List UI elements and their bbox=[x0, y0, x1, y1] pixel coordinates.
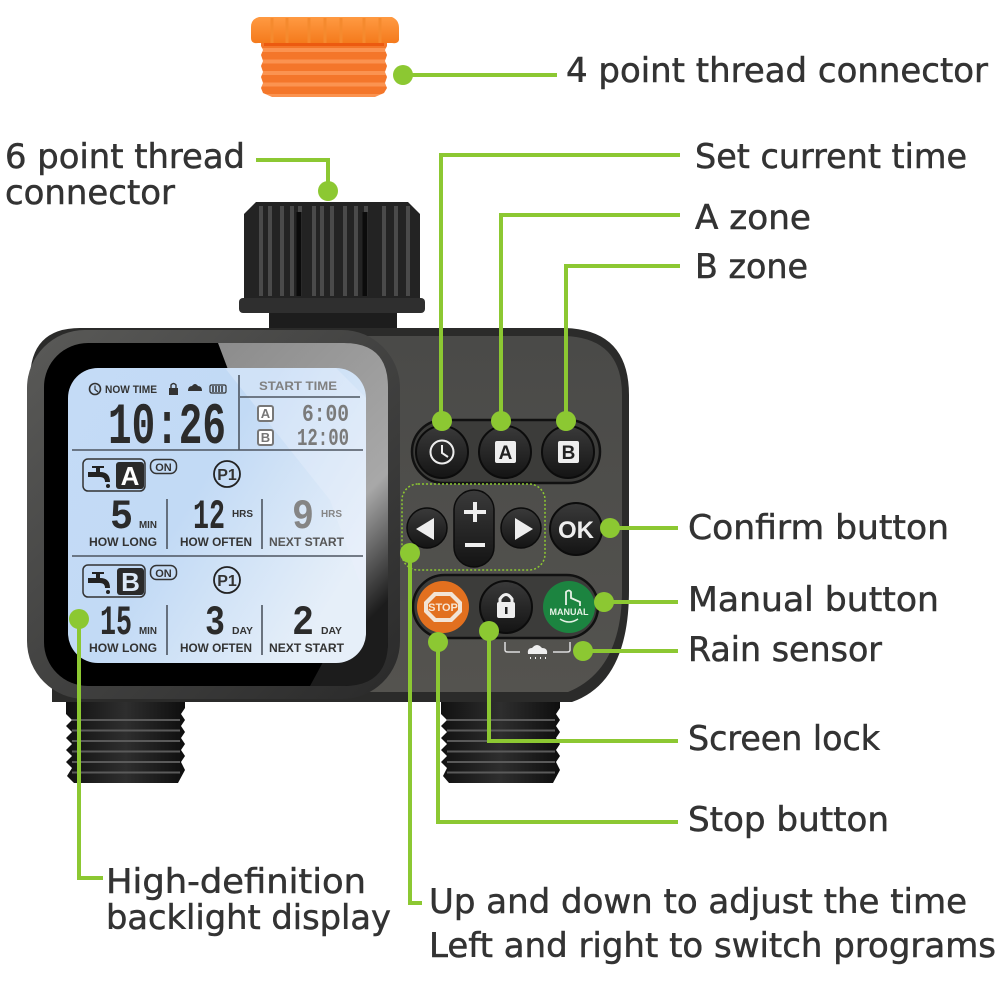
callout line: B zone bbox=[556, 266, 680, 431]
zone B program bbox=[83, 565, 345, 655]
callout line: set current time bbox=[432, 155, 680, 431]
callout line: backlight display bbox=[69, 609, 103, 878]
OK button bbox=[550, 503, 602, 555]
zone A program: MIN bbox=[139, 520, 157, 531]
orange 4 point thread connector bbox=[251, 17, 399, 97]
OK button: OK bbox=[558, 517, 595, 544]
callout line: stop button bbox=[428, 632, 678, 822]
control panel surface bbox=[360, 336, 622, 692]
label: 6 point thread connector: connector bbox=[5, 173, 175, 213]
top button group: clock, A, B: A bbox=[499, 443, 513, 464]
bottom button group: stop, lock, manual bbox=[413, 575, 598, 638]
current time readout: 10:26 bbox=[108, 396, 226, 461]
callout line: 4 point thread connector bbox=[393, 65, 557, 85]
directional keypad bbox=[402, 484, 545, 570]
callout line: screen lock bbox=[479, 621, 678, 741]
label: rain sensor: Rain sensor bbox=[688, 630, 882, 670]
timer body bbox=[30, 328, 629, 702]
zone B program: HOW LONG bbox=[89, 641, 157, 655]
label: set current time: Set current time bbox=[695, 137, 967, 177]
zone A program: HRS bbox=[321, 509, 342, 520]
label: keypad directions: Left and right to switch programs bbox=[429, 926, 996, 966]
inlet nut with 6 point thread bbox=[239, 202, 425, 330]
zone B program: HOW OFTEN bbox=[180, 641, 252, 655]
callout line: manual button bbox=[594, 592, 678, 612]
threaded outlet right bbox=[441, 700, 560, 783]
label: 6 point thread connector: 6 point thread bbox=[5, 137, 245, 177]
start time panel: START TIME bbox=[259, 379, 337, 393]
zone B program: DAY bbox=[321, 626, 342, 637]
threaded outlet left bbox=[66, 700, 185, 783]
label: B zone: B zone bbox=[695, 247, 808, 287]
callout line: 6 point thread connector bbox=[256, 160, 338, 201]
label: screen lock: Screen lock bbox=[688, 719, 880, 759]
start time panel: A bbox=[261, 406, 271, 421]
zone B program: DAY bbox=[232, 626, 253, 637]
start time panel: B bbox=[261, 430, 270, 445]
label: high-definition backlight display: backlight display bbox=[106, 898, 391, 938]
zone A program: 12 bbox=[193, 493, 225, 541]
label: high-definition backlight display: High-definition bbox=[106, 862, 366, 902]
screen bezel bbox=[27, 330, 400, 699]
zone B program: MIN bbox=[139, 626, 157, 637]
label: confirm button: Confirm button bbox=[688, 508, 949, 548]
start time panel: 6:00 bbox=[302, 402, 349, 429]
rain sensor icon bbox=[505, 642, 570, 658]
label: stop button: Stop button bbox=[688, 800, 889, 840]
zone A program: 9 bbox=[292, 493, 314, 541]
label: keypad directions: Up and down to adjust the time bbox=[429, 882, 967, 922]
bottom button group: stop, lock, manual: MANUAL bbox=[550, 607, 589, 617]
callout line: confirm button bbox=[600, 518, 678, 538]
label: 4 point thread connector: 4 point thread connector bbox=[566, 51, 988, 91]
zone A program: ON bbox=[155, 462, 172, 474]
zone B program: P1 bbox=[217, 573, 237, 590]
LCD screen bbox=[68, 368, 366, 663]
callout line: keypad directions bbox=[400, 543, 422, 903]
label: manual button: Manual button bbox=[688, 580, 939, 620]
zone A program: NEXT START bbox=[269, 535, 345, 549]
zone A program: A bbox=[121, 461, 140, 491]
callout line: A zone bbox=[491, 215, 680, 431]
zone B program: NEXT START bbox=[269, 641, 345, 655]
zone B program: 3 bbox=[205, 599, 225, 647]
zone B program: ON bbox=[155, 568, 172, 580]
start time panel bbox=[258, 379, 349, 453]
top button group: clock, A, B bbox=[412, 420, 600, 483]
zone B program: 15 bbox=[100, 599, 132, 647]
label: A zone: A zone bbox=[695, 198, 811, 238]
now time status row: NOW TIME bbox=[105, 384, 157, 396]
start time panel: 12:00 bbox=[297, 426, 349, 453]
zone A program: P1 bbox=[217, 467, 237, 484]
zone B program: B bbox=[121, 567, 140, 597]
zone A program: HOW LONG bbox=[89, 535, 157, 549]
callout line: rain sensor bbox=[573, 641, 678, 661]
bottom button group: stop, lock, manual: STOP bbox=[428, 602, 458, 614]
zone B program: 2 bbox=[292, 599, 314, 647]
zone A program: HRS bbox=[232, 509, 253, 520]
now time status row bbox=[90, 384, 226, 396]
zone A program: HOW OFTEN bbox=[180, 535, 252, 549]
top button group: clock, A, B: B bbox=[562, 443, 575, 464]
zone A program: 5 bbox=[110, 493, 133, 541]
zone A program bbox=[83, 459, 345, 549]
